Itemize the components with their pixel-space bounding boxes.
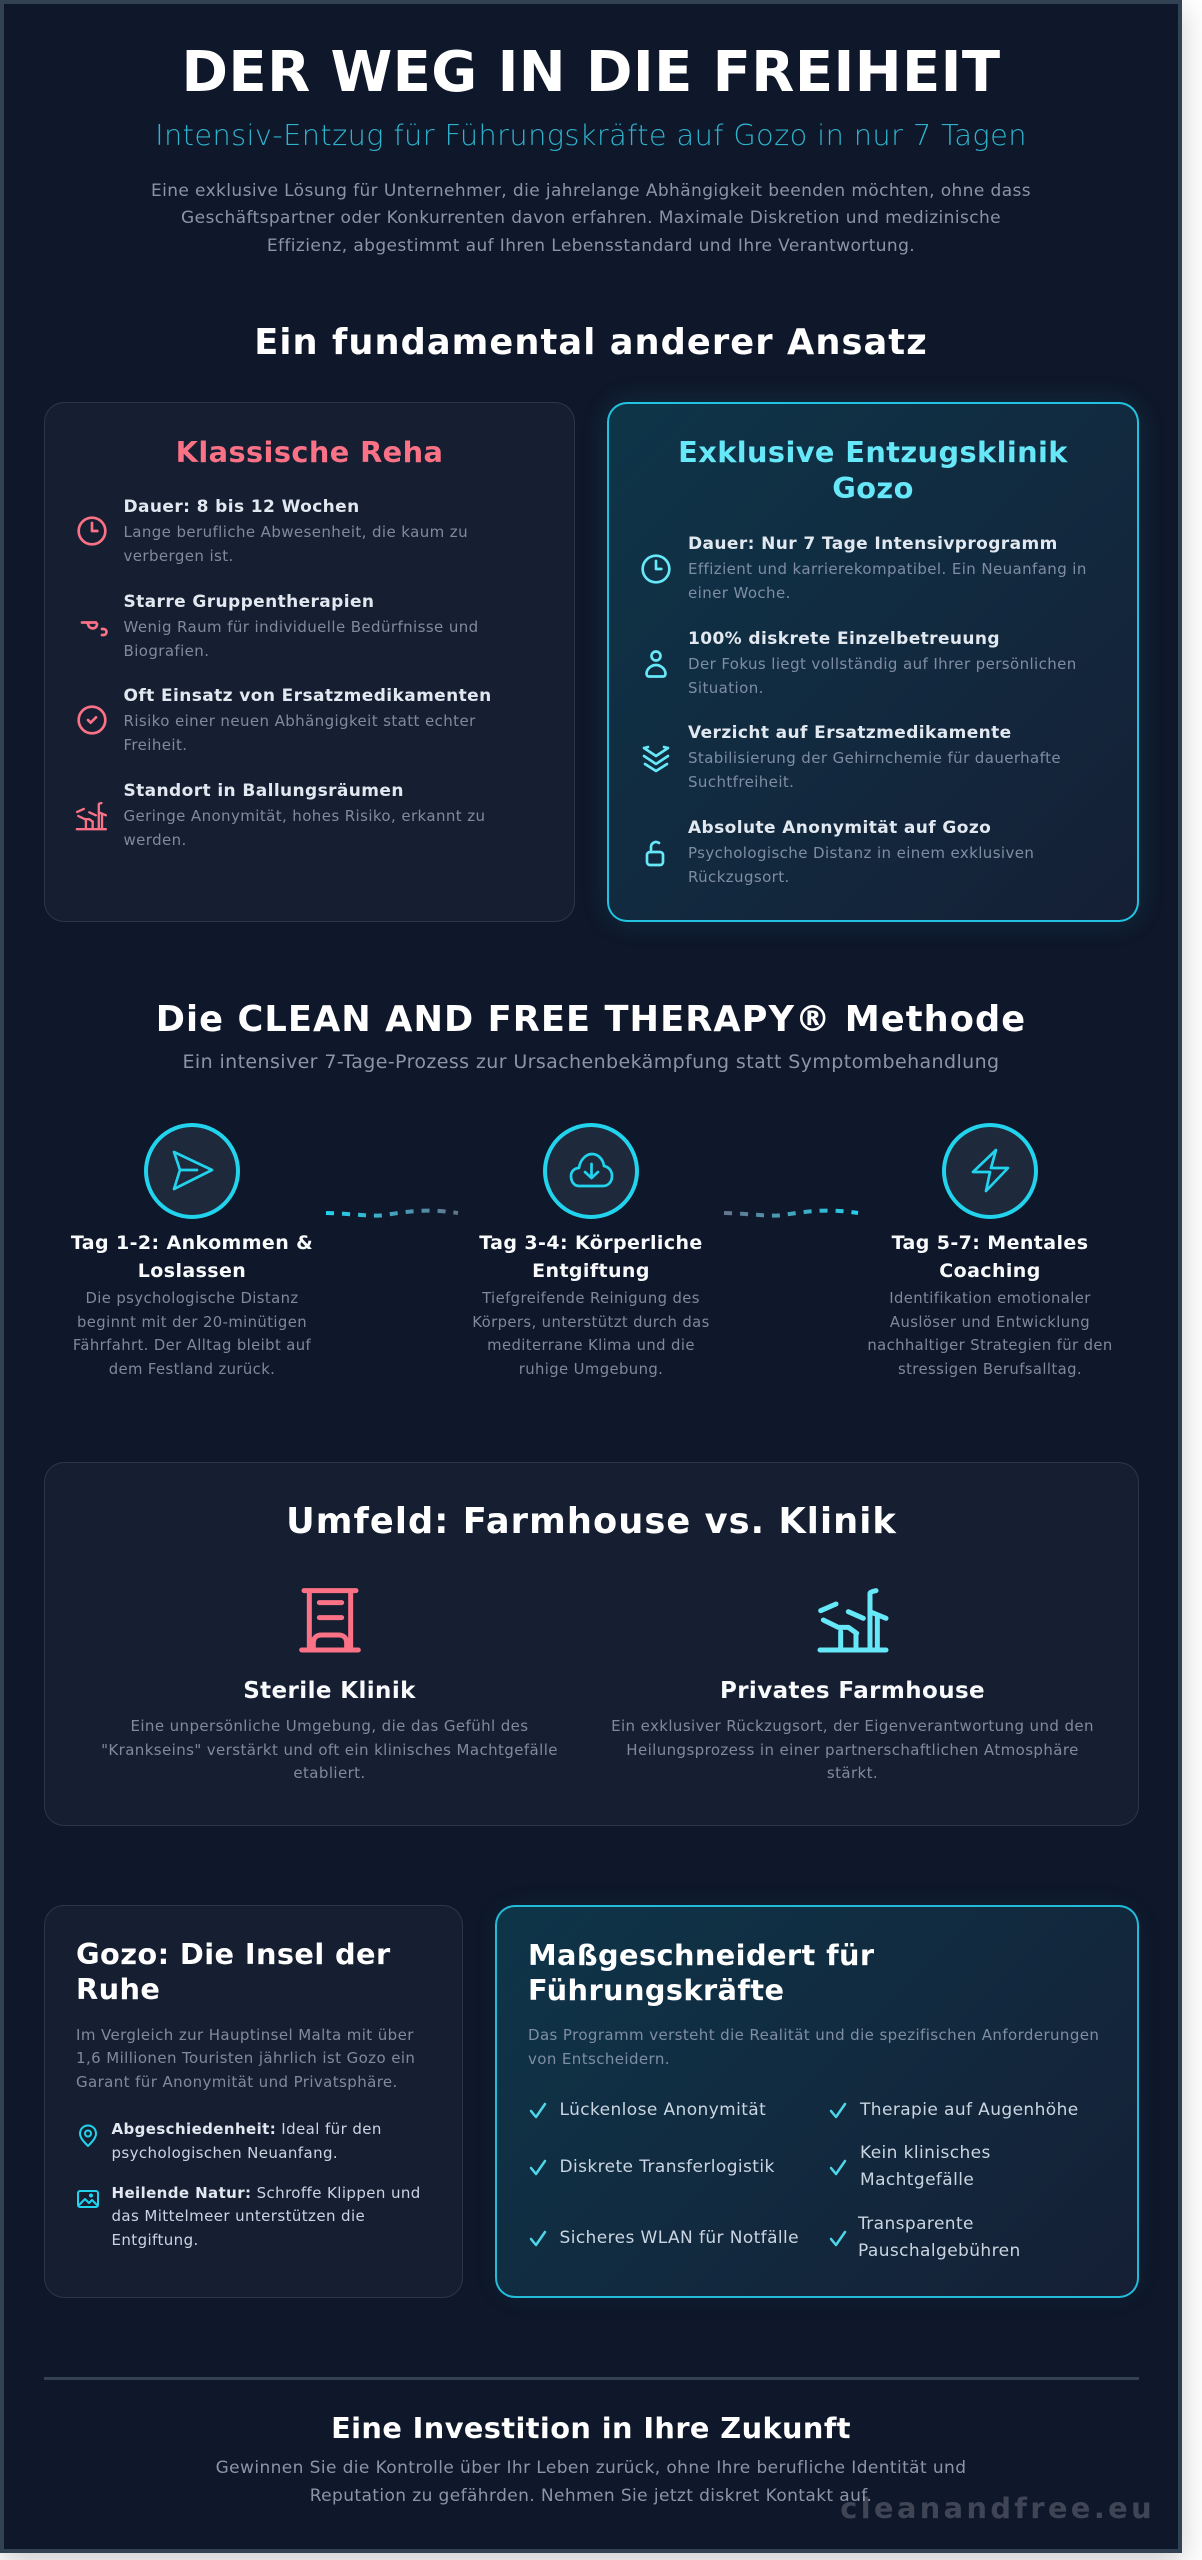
step description: Fährfahrt. Der Alltag bleibt auf [73, 1337, 311, 1354]
check: power gap [828, 2140, 1118, 2196]
item: duration [77, 497, 468, 565]
subheading: sterile clinic: Sterile Klinik [243, 1678, 416, 1704]
fact text: Entgiftung. [112, 2231, 199, 2249]
check: pricing [828, 2210, 1118, 2266]
item description [124, 712, 476, 754]
check text: Machtgefälle [860, 2170, 974, 2190]
step description: Auslöser und Entwicklung [890, 1314, 1090, 1331]
check text: Pauschalgebühren [858, 2241, 1021, 2261]
item description: verbergen ist. [124, 547, 234, 565]
panel: tailored for executives [495, 1905, 1139, 2298]
step description: beginnt mit der 20-minütigen [77, 1314, 307, 1331]
intro text: Geschäftspartner oder Konkurrenten davon erfahren. Maximale Diskretion und medizinische [181, 208, 1001, 228]
heading: approach: Ein fundamental anderer Ansatz [254, 322, 928, 363]
panel description: Im Vergleich zur Hauptinsel Malta mit über [76, 2026, 414, 2044]
panel description: von Entscheidern. [528, 2050, 670, 2068]
check text [860, 2140, 991, 2194]
icon circle: paper plane [144, 1123, 240, 1219]
item text: Starre Gruppentherapien [124, 592, 374, 612]
icon: farmhouse [800, 1570, 900, 1670]
icon circle: cloud [543, 1123, 639, 1219]
step title: Coaching [939, 1260, 1041, 1282]
step description: mediterrane Klima und die [487, 1337, 695, 1354]
fact text [112, 2182, 421, 2253]
icon: map pin [76, 2124, 100, 2148]
item description [688, 749, 1061, 791]
icon: paper plane [172, 1150, 214, 1190]
panel heading [76, 1937, 391, 2007]
item description: Wenig Raum für individuelle Bedürfnisse und [124, 618, 479, 636]
step title: Tag 5-7: Mentales [892, 1232, 1088, 1254]
step description [472, 1290, 710, 1378]
item text: Standort in Ballungsräumen [124, 781, 404, 801]
step description: stressigen Berufsalltag. [898, 1361, 1082, 1378]
item text: Absolute Anonymität auf Gozo [688, 818, 991, 838]
item description: Effizient und karrierekompatibel. Ein Neuanfang in [688, 560, 1087, 578]
item: location [76, 781, 485, 849]
checklist [528, 2096, 1118, 2276]
icon: chevrons [642, 746, 670, 772]
icon: check [528, 2095, 548, 2115]
panel: environment [44, 1462, 1139, 1826]
item text: Oft Einsatz von Ersatzmedikamenten [124, 686, 492, 706]
fact text: Abgeschiedenheit: Ideal für den [112, 2120, 382, 2138]
item description: Lange berufliche Abwesenheit, die kaum zu [124, 523, 468, 541]
icon: open lock [646, 840, 664, 866]
description: private farmhouse: stärkt. [827, 1764, 878, 1782]
heading: method: Die CLEAN AND FREE THERAPY® Methode [156, 999, 1026, 1040]
panel: classic rehab [44, 402, 575, 922]
item: anonymity [646, 818, 1034, 886]
item description: Rückzugsort. [688, 868, 790, 886]
method subtitle: Ein intensiver 7-Tage-Prozess zur Ursachenbekämpfung statt Symptombehandlung [182, 1051, 999, 1073]
subtitle: Intensiv-Entzug für Führungskräfte auf Gozo in nur 7 Tagen [155, 118, 1027, 152]
step title [70, 1232, 313, 1282]
icon: check [828, 2152, 848, 2172]
step description: Tiefgreifende Reinigung des [482, 1290, 700, 1307]
item description [124, 618, 479, 660]
step description: ruhige Umgebung. [519, 1361, 663, 1378]
intro text: Eine exklusive Lösung für Unternehmer, die jahrelange Abhängigkeit beenden möchten, ohne dass [151, 180, 1031, 200]
icon: landscape picture [76, 2186, 100, 2210]
fact text: Heilende Natur: Schroffe Klippen und [112, 2184, 421, 2202]
step title: Tag 1-2: Ankommen & [71, 1232, 313, 1254]
icon circle: bolt [942, 1123, 1038, 1219]
item description: Psychologische Distanz in einem exklusiven [688, 844, 1034, 862]
fact: seclusion [76, 2118, 436, 2166]
panel heading [528, 1938, 875, 2008]
step description: nachhaltiger Strategien für den [867, 1337, 1113, 1354]
watermark: cleanandfree.eu [840, 2491, 1155, 2525]
icon: lightning bolt [972, 1148, 1010, 1192]
fact text: psychologischen Neuanfang. [112, 2144, 338, 2162]
description: sterile clinic: "Krankseins" verstärkt und oft ein klinisches Machtgefälle [101, 1741, 558, 1759]
panel title: classic rehab: Klassische Reha [176, 434, 443, 468]
description: private farmhouse: Heilungsprozess in einer partnerschaftlichen Atmosphäre [626, 1741, 1079, 1759]
step: day 5-7 [867, 1123, 1113, 1378]
item description: Biografien. [124, 642, 209, 660]
check text [858, 2210, 1021, 2266]
check text: Transparente [858, 2214, 974, 2234]
item description [124, 807, 485, 849]
description: sterile clinic: etabliert. [293, 1764, 366, 1782]
check text: Therapie auf Augenhöhe [860, 2100, 1079, 2120]
panel description: Garant für Anonymität und Privatsphäre. [76, 2073, 398, 2091]
item description [688, 654, 1077, 696]
item description [688, 844, 1034, 886]
icon: clinic building [280, 1570, 380, 1670]
check: anonymity [528, 2096, 818, 2126]
intro text: Effizienz, abgestimmt auf Ihren Lebensstandard und Ihre Verantwortung. [267, 236, 915, 256]
intro text [151, 180, 1031, 256]
icon: broken group [80, 621, 108, 636]
icon: person [645, 650, 667, 678]
description: sterile clinic [80, 1715, 580, 1786]
item description: einer Woche. [688, 584, 791, 602]
description: private farmhouse [602, 1715, 1102, 1786]
step: day 1-2 [70, 1123, 313, 1378]
title: DER WEG IN DIE FREIHEIT [182, 40, 1000, 105]
item description: Freiheit. [124, 736, 187, 754]
step title [892, 1232, 1088, 1282]
subheading: private farmhouse: Privates Farmhouse [720, 1678, 985, 1704]
step title: Loslassen [138, 1260, 246, 1282]
step description: Identifikation emotionaler [889, 1290, 1091, 1307]
step description: dem Festland zurück. [109, 1361, 275, 1378]
item description: Geringe Anonymität, hohes Risiko, erkannt zu [124, 807, 485, 825]
item description: Suchtfreiheit. [688, 773, 794, 791]
check text: Lückenlose Anonymität [560, 2100, 766, 2120]
step title [479, 1232, 703, 1282]
item description [688, 560, 1087, 602]
panel heading: Maßgeschneidert für [528, 1938, 875, 1972]
icon: check [828, 2223, 848, 2243]
item description [124, 523, 468, 565]
panel heading: Gozo: Die Insel der [76, 1937, 391, 1971]
item: group therapy [80, 592, 479, 660]
item: individual care [645, 628, 1077, 696]
footer text: Reputation zu gefährden. Nehmen Sie jetzt diskret Kontakt auf. [310, 2486, 872, 2506]
step title: Entgiftung [532, 1260, 650, 1282]
item description: werden. [124, 831, 187, 849]
description: sterile clinic: Eine unpersönliche Umgebung, die das Gefühl des [130, 1717, 529, 1735]
item description: Situation. [688, 678, 764, 696]
footer text [0, 2454, 1182, 2510]
icon: check circle [77, 705, 107, 735]
icon: clock [641, 554, 671, 584]
item: duration [641, 534, 1087, 602]
step description: Körpers, unterstützt durch das [472, 1314, 710, 1331]
fact: nature [76, 2182, 436, 2254]
panel title: exclusive clinic: Exklusive Entzugsklinik [678, 435, 1068, 469]
panel: exclusive clinic [607, 402, 1139, 922]
step: day 3-4 [472, 1123, 710, 1378]
panel heading: Umfeld: Farmhouse vs. Klinik [286, 1501, 897, 1542]
arrow: connector 1 [326, 1208, 458, 1218]
item text: Verzicht auf Ersatzmedikamente [688, 723, 1012, 743]
icon: city [76, 802, 107, 830]
item text: Dauer: Nur 7 Tage Intensivprogramm [688, 534, 1058, 554]
item description: Stabilisierung der Gehirnchemie für dauerhafte [688, 749, 1061, 767]
check text: Diskrete Transferlogistik [560, 2156, 775, 2176]
panel title: exclusive clinic: Gozo [832, 471, 914, 505]
icon: check [528, 2223, 548, 2243]
check text: Kein klinisches [860, 2142, 991, 2162]
footer heading: Eine Investition in Ihre Zukunft [331, 2411, 851, 2445]
check text: Sicheres WLAN für Notfälle [560, 2228, 799, 2248]
panel description: Das Programm versteht die Realität und die spezifischen Anforderungen [528, 2026, 1099, 2044]
icon: cloud download [570, 1152, 614, 1188]
step title: Tag 3-4: Körperliche [479, 1232, 703, 1254]
item description: Risiko einer neuen Abhängigkeit statt echter [124, 712, 476, 730]
item: medication [77, 686, 492, 754]
item text: 100% diskrete Einzelbetreuung [688, 628, 1000, 648]
panel description [528, 2024, 1099, 2071]
check: transfer [528, 2152, 818, 2182]
panel heading: Führungskräfte [528, 1973, 784, 2007]
fact text [112, 2118, 382, 2165]
item text: Dauer: 8 bis 12 Wochen [124, 497, 360, 517]
arrow: connector 2 [724, 1208, 858, 1218]
step description: Die psychologische Distanz [85, 1290, 299, 1307]
check: eye level [828, 2096, 1118, 2126]
panel: Gozo island [44, 1905, 463, 2298]
footer text: Gewinnen Sie die Kontrolle über Ihr Leben zurück, ohne Ihre berufliche Identität und [216, 2458, 966, 2478]
icon: check [828, 2095, 848, 2115]
check: wifi [528, 2224, 818, 2254]
step description [867, 1290, 1113, 1378]
icon: check [528, 2152, 548, 2172]
item: no medication [642, 723, 1061, 791]
fact text: das Mittelmeer unterstützen die [112, 2207, 365, 2225]
panel description: 1,6 Millionen Touristen jährlich ist Gozo ein [76, 2049, 415, 2067]
panel heading: Ruhe [76, 1972, 160, 2006]
panel title: exclusive clinic [678, 435, 1068, 505]
panel description [76, 2024, 415, 2095]
item description: Der Fokus liegt vollständig auf Ihrer persönlichen [688, 654, 1077, 672]
icon: clock [77, 516, 107, 546]
step description [73, 1290, 311, 1378]
description: private farmhouse: Ein exklusiver Rückzugsort, der Eigenverantwortung und den [611, 1717, 1094, 1735]
